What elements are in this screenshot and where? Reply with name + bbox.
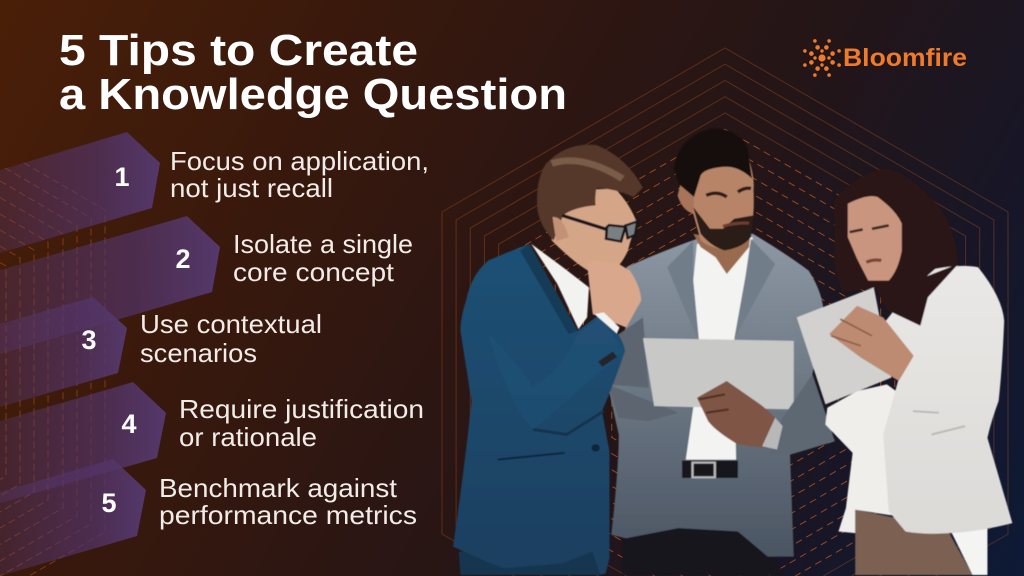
text 3: scenarios (140, 338, 257, 368)
title (59, 26, 567, 119)
person: woman (825, 169, 1012, 575)
number 4: 4 (121, 409, 137, 439)
text 1: not just recall (170, 173, 333, 203)
tip 2 (0, 216, 413, 354)
logo: Bloomfire (805, 41, 967, 75)
text 2: Isolate a single (233, 229, 413, 259)
tablet: right (797, 287, 891, 404)
background hexagon pattern: right (442, 48, 1008, 576)
arrow 5 (0, 459, 146, 576)
tablet: centre (643, 338, 794, 409)
text 2: core concept (233, 257, 395, 287)
tip 4 (0, 382, 424, 503)
arrow 4 (0, 382, 166, 503)
hand: woman (829, 306, 914, 381)
hand with watch (697, 374, 835, 455)
arrow 3 (0, 297, 127, 407)
arrow 2 (0, 216, 220, 354)
text 4: or rationale (179, 422, 317, 452)
text 1: Focus on application, (170, 146, 429, 176)
text 4: Require justification (179, 394, 424, 424)
text 3: Use contextual (140, 309, 322, 339)
person: left man (453, 145, 643, 575)
tip 3 (0, 297, 322, 407)
tip 5 (0, 459, 417, 576)
background hexagon pattern: left (0, 163, 105, 576)
number 3: 3 (81, 325, 97, 355)
photo: three colleagues with tablets (453, 128, 1012, 575)
number 5: 5 (101, 488, 117, 518)
person: centre man (608, 128, 835, 575)
title: 5 Tips to Create (59, 26, 418, 75)
arrow 1 (0, 132, 160, 253)
tip 1 (0, 132, 429, 253)
number 2: 2 (175, 244, 191, 274)
wordmark: Bloomfire (843, 44, 967, 72)
title: a Knowledge Question (59, 70, 567, 119)
number 1: 1 (114, 162, 130, 192)
text 5: performance metrics (159, 500, 417, 530)
text 5: Benchmark against (159, 473, 398, 503)
icon: bloom burst (805, 41, 839, 75)
